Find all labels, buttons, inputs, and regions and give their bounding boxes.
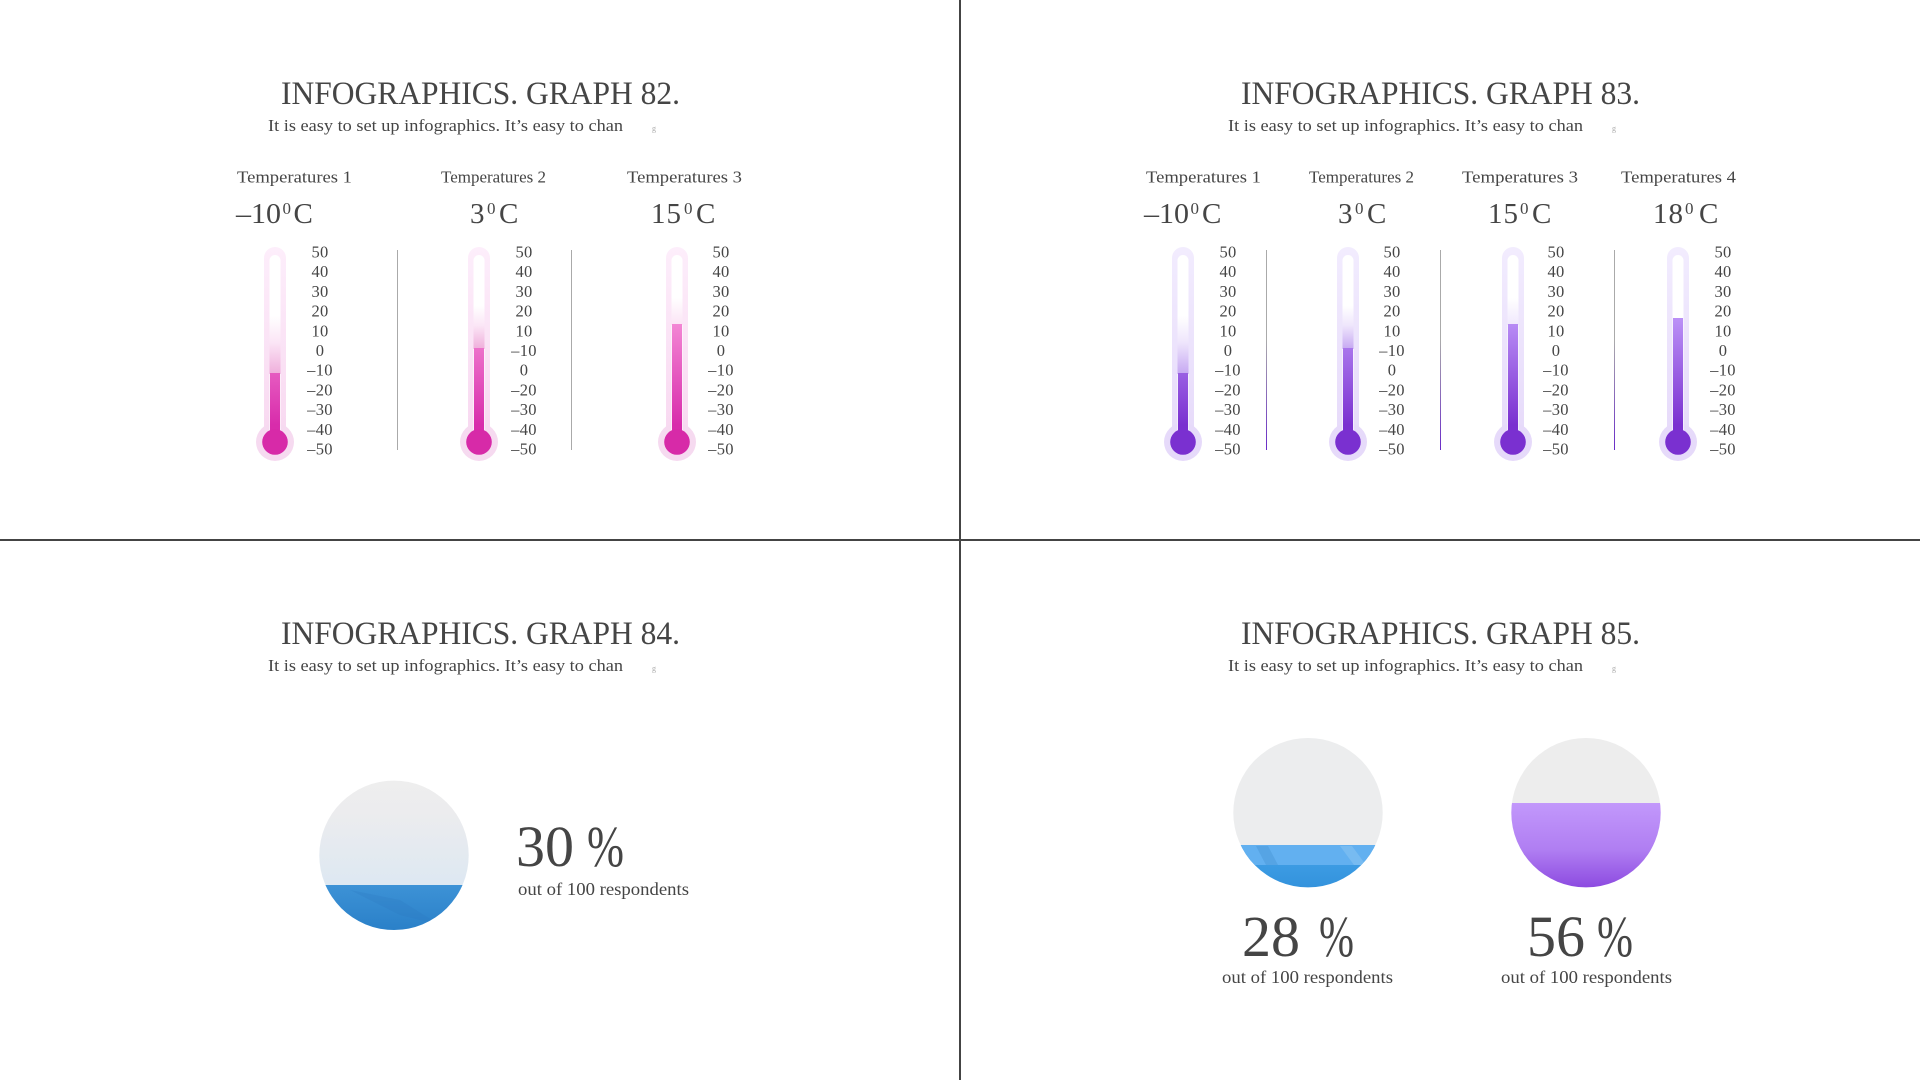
value: 3 C: 0 [487,199,496,218]
value: 15 C: 0 [1520,199,1528,218]
label: temperatures 3: Temperatures 3 [1462,168,1578,186]
scale: thermometer 3: –10 [1542,361,1569,380]
value: -10 C [1143,198,1221,230]
scale: thermometer 2: –50 [510,440,537,458]
scale: thermometer 2: –50 [1378,440,1405,458]
scale: thermometer 2: –40 [1378,420,1405,439]
scale: thermometer 4: –30 [1709,400,1736,419]
heading: graph 85: INFOGRAPHICS. GRAPH 85. [1241,616,1640,652]
scale: thermometer 1: –40 [1214,420,1241,439]
scale: thermometer 4: 20 [1714,302,1732,321]
value: 3 C: 3 [470,198,484,230]
value: 30 percent: % [587,814,624,879]
value: 15 C: C [1532,198,1551,230]
scale: thermometer 1: 0 [1224,341,1232,360]
scale: thermometer 4: –10 [1709,361,1736,380]
scale: thermometer 3: –40 [707,420,734,439]
value: 15 C [651,198,715,230]
scale: thermometer 3: –30 [707,400,734,419]
separator [571,250,572,450]
value: -10 C [235,198,313,230]
separator [397,250,398,450]
circle gauge: 56 percent [1511,738,1661,888]
scale: thermometer 2: 10 [515,321,533,340]
scale: thermometer 3: 40 [712,262,730,281]
scale: thermometer 2: 20 [1383,302,1401,321]
scale: thermometer 4: 30 [1714,282,1732,301]
scale: thermometer 3: 10 [1547,321,1565,340]
thermometer 1 [256,247,294,461]
panel: graph 84 [268,616,689,931]
scale: thermometer 2: –10 [1378,341,1405,360]
value: -10 C: C [294,198,313,230]
vertical divider between panels [959,0,961,1080]
scale: thermometer 2: 40 [1383,262,1401,281]
scale: thermometer 1: –20 [1214,380,1241,399]
scale: thermometer 3: 40 [1547,262,1565,281]
value: 56 percent: % [1597,904,1633,969]
scale: thermometer 3: –40 [1542,420,1569,439]
scale: thermometer 1: –40 [306,420,333,439]
horizontal divider between panels [0,539,1920,541]
value: 30 percent [516,814,624,879]
scale: thermometer 2: 30 [515,282,533,301]
scale: thermometer 3: 30 [1547,282,1565,301]
scale: thermometer 2: –20 [1378,380,1405,399]
value: 3 C [1338,198,1386,230]
scale: thermometer 3: –20 [707,380,734,399]
scale: thermometer 2: 10 [1383,321,1401,340]
scale: thermometer 4: –20 [1709,380,1736,399]
scale: thermometer 1: –50 [306,440,333,458]
value: 15 C: C [696,198,715,230]
value: 15 C: 15 [651,198,681,230]
thermometer 2 [460,247,498,461]
value: 18 C: C [1699,198,1718,230]
separator [1440,250,1441,450]
thermometer 1 [1164,247,1202,461]
heading: graph 84: INFOGRAPHICS. GRAPH 84. [281,616,680,652]
value: 15 C: 0 [684,199,692,218]
scale: thermometer 1: 10 [311,321,329,340]
scale: thermometer 3: –30 [1542,400,1569,419]
scale: thermometer 3: –50 [1542,440,1569,458]
scale: thermometer 3: 0 [1552,341,1560,360]
scale: thermometer 1: –10 [306,361,333,380]
label: temperatures 2: Temperatures 2 [441,168,546,186]
value: 15 C: 15 [1488,198,1518,230]
scale: thermometer 1: 0 [316,341,324,360]
value: -10 C: 0 [282,199,291,218]
scale: thermometer 1: 30 [311,282,329,301]
scale: thermometer 1: 50 [1219,242,1237,262]
scale: thermometer 2: 0 [520,361,528,380]
value: 3 C: 0 [1355,199,1364,218]
scale: thermometer 4: 50 [1714,242,1732,262]
scale: thermometer 2: 30 [1383,282,1401,301]
value: 28 percent: 28 [1242,904,1300,969]
scale: thermometer 2: –30 [1378,400,1405,419]
heading: graph 82: INFOGRAPHICS. GRAPH 82. [281,76,680,112]
scale: thermometer 3: 0 [717,341,725,360]
scale: thermometer 2: –10 [510,341,537,360]
value: 3 C: C [1367,198,1386,230]
scale: thermometer 3: 30 [712,282,730,301]
scale: thermometer 3: –50 [707,440,734,458]
value: 3 C [470,198,518,230]
value: 3 C: 3 [1338,198,1352,230]
panel: graph 83 [1143,76,1736,461]
value: -10 C: –10 [1143,198,1189,230]
separator [1614,250,1615,450]
scale: thermometer 1: 50 [311,242,329,262]
scale: thermometer 2: –40 [510,420,537,439]
separator [1266,250,1267,450]
panel: graph 82 [235,76,742,461]
scale: thermometer 4: 40 [1714,262,1732,281]
scale: thermometer 1: 10 [1219,321,1237,340]
value: 15 C [1488,198,1551,230]
value: -10 C: 0 [1190,199,1199,218]
scale: thermometer 1: 20 [311,302,329,321]
panel: graph 85 [1222,616,1672,987]
scale: thermometer 1: 30 [1219,282,1237,301]
label: temperatures 2: Temperatures 2 [1309,168,1414,186]
scale: thermometer 1: –30 [1214,400,1241,419]
value: -10 C: C [1202,198,1221,230]
thermometer 3 [658,247,696,461]
scale: thermometer 3: 20 [712,302,730,321]
subtitle: graph 85: It is easy to set up infographics. It’s easy to chan [1228,656,1584,675]
value: 3 C: C [499,198,518,230]
subtitle: graph 82: It is easy to set up infographics. It’s easy to chan [268,116,624,135]
scale: thermometer 2: 40 [515,262,533,281]
scale: thermometer 1: 40 [311,262,329,281]
value: -10 C: –10 [235,198,281,230]
caption: 30 percent: out of 100 respondents [518,879,689,899]
scale: thermometer 3: 50 [1547,242,1565,262]
scale: thermometer 1: 20 [1219,302,1237,321]
value: 18 C: 18 [1653,198,1683,230]
scale: thermometer 2: –30 [510,400,537,419]
scale: thermometer 1: –10 [1214,361,1241,380]
subtitle: graph 84: It is easy to set up infographics. It’s easy to chan [268,656,624,675]
subtitle: graph 83: It is easy to set up infographics. It’s easy to chan [1228,116,1584,135]
scale: thermometer 1: –20 [306,380,333,399]
heading: graph 83: INFOGRAPHICS. GRAPH 83. [1241,76,1640,112]
value: 18 C: 0 [1685,199,1694,218]
scale: thermometer 1: –30 [306,400,333,419]
scale: thermometer 3: 10 [712,321,730,340]
scale: thermometer 3: 20 [1547,302,1565,321]
thermometer 4 [1659,247,1697,461]
value: 28 percent: % [1319,904,1354,969]
subtitle: graph 83: g [1612,124,1616,133]
circle gauge: 28 percent [1233,738,1383,888]
subtitle: graph 84: g [652,664,656,673]
caption: 56 percent: out of 100 respondents [1501,967,1672,987]
scale: thermometer 3: 50 [712,242,730,262]
scale: thermometer 1: –50 [1214,440,1241,458]
scale: thermometer 4: –40 [1709,420,1736,439]
value: 18 C [1653,198,1718,230]
scale: thermometer 1: 40 [1219,262,1237,281]
scale: thermometer 2: 0 [1388,361,1396,380]
scale: thermometer 4: 10 [1714,321,1732,340]
caption: 28 percent: out of 100 respondents [1222,967,1393,987]
scale: thermometer 3: –20 [1542,380,1569,399]
value: 30 percent: 30 [516,814,574,879]
scale: thermometer 2: 50 [515,242,533,262]
label: temperatures 4: Temperatures 4 [1621,168,1736,186]
label: temperatures 1: Temperatures 1 [1146,168,1261,186]
value: 56 percent: 56 [1527,904,1585,969]
subtitle: graph 85: g [1612,664,1616,673]
subtitle: graph 82: g [652,124,656,133]
label: temperatures 3: Temperatures 3 [627,168,742,186]
circle gauge: 30 percent [319,780,469,931]
scale: thermometer 3: –10 [707,361,734,380]
scale: thermometer 4: –50 [1709,440,1736,458]
scale: thermometer 2: –20 [510,380,537,399]
thermometer 3 [1494,247,1532,461]
value: 56 percent [1527,904,1633,969]
scale: thermometer 2: 50 [1383,242,1401,262]
scale: thermometer 2: 20 [515,302,533,321]
value: 28 percent [1242,904,1354,969]
thermometer 2 [1329,247,1367,461]
scale: thermometer 4: 0 [1719,341,1727,360]
label: temperatures 1: Temperatures 1 [237,168,352,186]
